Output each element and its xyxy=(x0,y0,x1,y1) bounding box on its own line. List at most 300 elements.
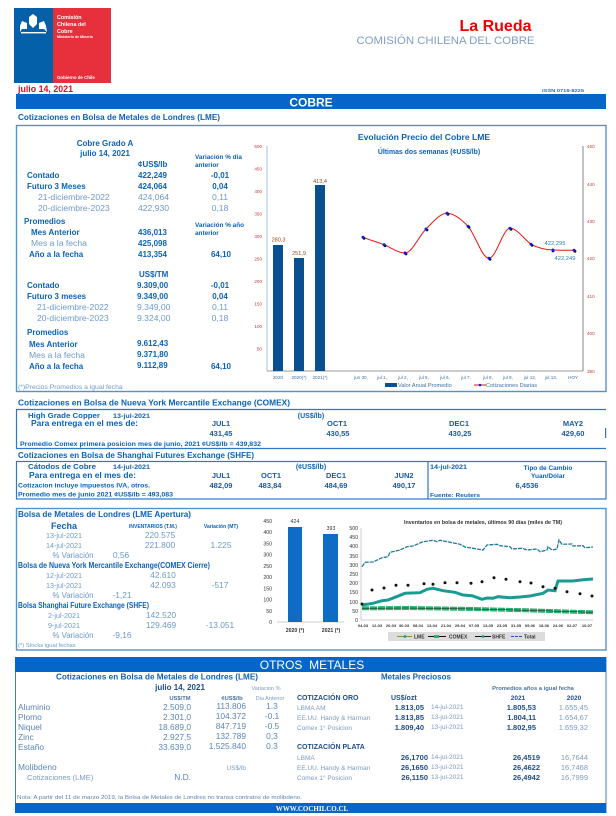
panel: SHFE: Tipo de Cambio xyxy=(524,465,572,472)
x axis: 30-03 xyxy=(399,623,410,628)
table: copper grade A: 422,930 xyxy=(138,203,169,213)
left axis: 200 xyxy=(254,279,262,284)
chart: inventory bars: 250 xyxy=(263,564,272,570)
table: precious metals: EE.UU. Handy & Harman xyxy=(297,765,371,772)
panel: SHFE: Yuan/Dólar xyxy=(531,473,565,480)
x axis: 21-04 xyxy=(441,623,452,628)
table: inventories: -13.051 xyxy=(206,620,235,630)
legend: COMEX xyxy=(449,634,468,640)
table: inventories: % Variación xyxy=(52,631,94,640)
panel: SHFE: 483,84 xyxy=(259,481,282,490)
left axis: 250 xyxy=(254,256,262,262)
table: precious metals: 1.802,95 xyxy=(507,723,536,732)
table: precious metals: 2021 xyxy=(511,695,526,702)
line: LME xyxy=(362,579,593,605)
chart: inventory bars: 100 xyxy=(263,598,272,604)
footer: website xyxy=(15,803,606,813)
table: inventories: 2-jul-2021 xyxy=(48,611,80,620)
table: copper grade A: Futuro 3 meses xyxy=(27,292,87,301)
table: inventories: Bolsa de Nueva York Mercantile Exchange(COMEX Cierre) xyxy=(18,561,210,570)
table: precious metals: COTIZACIÓN PLATA xyxy=(297,742,365,751)
x axis labels: 2020(*) xyxy=(291,375,307,380)
x axis: 18-06 xyxy=(539,623,550,628)
panel: COMEX: Promedio Comex primera posicion mes de junio, 2021 ¢US$/lb = 439,832 xyxy=(20,442,262,448)
table: copper grade A: 413,354 xyxy=(138,250,167,259)
x axis labels: HOY xyxy=(568,375,578,380)
table: precious metals: 13-jul-2021 xyxy=(431,764,464,771)
table: precious metals: 14-jul-2021 xyxy=(431,704,464,711)
heading: LME: Cotizaciones en Bolsa de Metales de Londres (LME) xyxy=(18,113,220,122)
table: copper grade A: 9.309,00 xyxy=(137,281,169,290)
table: base metals: -0.5 xyxy=(265,721,280,731)
x axis labels: jul 6, xyxy=(439,375,450,380)
left axis: 100 xyxy=(254,324,262,329)
table: inventories: (*) Stocks igual fechas xyxy=(18,643,76,649)
table: precious metals: 1.809,40 xyxy=(395,723,424,732)
table: precious metals: 1.804,11 xyxy=(507,713,536,722)
table: base metals: Variacion % xyxy=(252,686,281,692)
table: base metals: 2.301,0 xyxy=(163,712,191,722)
y axis: 400 xyxy=(349,544,358,550)
right axis: 390 xyxy=(587,369,595,374)
table: inventories xyxy=(18,510,238,649)
table: base metals: ¢US$/lb xyxy=(221,696,243,702)
table: inventories: 220.575 xyxy=(145,530,175,540)
table: precious metals: 13-jul-2021 xyxy=(431,774,464,781)
section banner: COBRE: COBRE xyxy=(289,96,333,110)
right axis: 440 xyxy=(587,182,595,187)
left axis xyxy=(254,144,262,352)
table: copper grade A: 20-diciembre-2023 xyxy=(38,203,110,213)
panel: SHFE: Cátodos de Cobre xyxy=(28,464,96,471)
table: inventories: -517 xyxy=(212,580,229,590)
right axis: 450 xyxy=(587,144,595,149)
panel: SHFE: JUN2 xyxy=(394,471,414,480)
chart: inventories last 90 days: Inventarios en bolsa de metales, últimos 90 días (miles de TM) xyxy=(404,520,562,526)
y axis: 50 xyxy=(352,609,358,615)
bars: annual average: 280,3 xyxy=(272,238,285,244)
table: inventories: Fecha xyxy=(51,521,78,531)
table: copper grade A: Mes a la fecha xyxy=(31,238,87,248)
legend: Valor Anual Promedio xyxy=(398,383,452,389)
panel: SHFE: OCT1 xyxy=(261,471,281,480)
table: copper grade A: Contado xyxy=(27,281,60,290)
legend xyxy=(385,383,537,389)
table: copper grade A: anterior xyxy=(195,230,219,237)
panel: SHFE: 490,17 xyxy=(393,481,415,490)
panel: COMEX: DEC1 xyxy=(449,419,469,428)
table: base metals: 2.509,0 xyxy=(163,702,191,712)
footer: website: WWW.COCHILCO.CL xyxy=(276,805,349,813)
left axis: 50 xyxy=(257,346,262,352)
table: copper grade A: anterior xyxy=(195,162,219,169)
table: copper grade A: 20-diciembre-2023 xyxy=(37,313,109,323)
table: copper grade A: Variación % año xyxy=(195,222,244,229)
x axis: 04-03 xyxy=(358,623,369,628)
chart: inventory bars: 0 xyxy=(269,620,272,626)
table: precious metals: Promedios años a igual fecha xyxy=(492,686,575,692)
legend: LME xyxy=(414,634,425,640)
line: daily prices: 422,249 xyxy=(555,256,575,262)
panel: SHFE: 482,09 xyxy=(210,481,232,490)
x axis labels: jul 9, xyxy=(502,375,513,380)
title: La Rueda xyxy=(459,18,532,35)
x axis labels: jul 13, xyxy=(544,375,557,380)
table: precious metals: 1.813,05 xyxy=(395,703,424,712)
chart: copper price evolution: Últimas dos semanas (¢US$/lb) xyxy=(378,147,480,156)
y axis: 0 xyxy=(355,618,358,624)
date: julio 14, 2021 xyxy=(17,84,73,94)
table: precious metals: EE.UU. Handy & Harman xyxy=(297,715,371,722)
chart: inventory bars: 2021 (*) xyxy=(322,628,340,634)
chart: inventory bars: 150 xyxy=(263,586,272,592)
chart: inventory bars xyxy=(263,519,344,634)
table: base metals: 104.372 xyxy=(216,711,246,721)
left axis: 500 xyxy=(254,144,262,149)
table: copper grade A: 0,04 xyxy=(212,182,228,191)
table: inventories: 42.610 xyxy=(150,570,176,580)
table: base metals: -0.1 xyxy=(265,711,280,721)
table: base metals: Aluminio xyxy=(18,702,50,712)
chart: inventory bars: 400 xyxy=(263,530,272,536)
chart: inventories last 90 days xyxy=(349,520,594,641)
table: precious metals: 16,7644 xyxy=(561,753,588,762)
table: inventories: 1.225 xyxy=(211,540,232,550)
x axis labels: jul 5, xyxy=(418,375,429,380)
panel: SHFE: 6,4536 xyxy=(516,481,538,490)
table: inventories: 0,56 xyxy=(113,550,129,560)
table: precious metals: 13-jul-2021 xyxy=(431,714,464,721)
table: copper grade A xyxy=(18,139,244,391)
table: base metals: Plomo xyxy=(18,712,42,722)
table: base metals: 113.806 xyxy=(216,701,246,711)
table: precious metals: 26,1150 xyxy=(401,773,428,782)
table: copper grade A: 21-diciembre-2022 xyxy=(38,192,110,202)
heading: SHFE: Cotizaciones en Bolsa de Shanghai Futures Exchange (SHFE) xyxy=(18,451,254,460)
y axis: 300 xyxy=(349,563,358,569)
table: base metals: Zinc xyxy=(18,732,34,742)
table: base metals: 132.789 xyxy=(216,731,246,741)
y axis: 150 xyxy=(349,590,358,596)
panel: SHFE: 14-jul-2021 xyxy=(430,465,468,471)
table: precious metals: 26,1650 xyxy=(401,763,428,772)
table: copper grade A: 64,10 xyxy=(211,250,232,259)
table: precious metals: 1.654,67 xyxy=(559,713,588,722)
chart: copper price evolution: Evolución Precio del Cobre LME xyxy=(358,132,490,142)
logo: Comisión Chilena del Cobre: Ministerio de Minería xyxy=(57,35,94,39)
left axis: 350 xyxy=(254,212,262,216)
heading: COMEX: Cotizaciones en Bolsa de Nueva York Mercantile Exchange (COMEX) xyxy=(18,398,290,408)
right axis: 430 xyxy=(587,219,595,224)
table: precious metals: 26,4622 xyxy=(513,763,540,772)
panel: COMEX: 13-jul-2021 xyxy=(113,413,150,420)
table: copper grade A: 9.349,00 xyxy=(137,292,169,301)
table: inventories: Variación (MT) xyxy=(204,524,238,530)
chart: inventory bars: 424 xyxy=(291,519,299,525)
table: copper grade A: julio 14, 2021 xyxy=(79,149,130,158)
left axis: 300 xyxy=(254,234,262,239)
x axis: 31-05 xyxy=(511,623,522,628)
table: base metals xyxy=(17,672,302,801)
panel: COMEX: High Grade Copper xyxy=(28,413,100,420)
table: copper grade A: Promedios xyxy=(27,328,69,337)
table: base metals: Cotizaciones en Bolsa de Metales de Londres (LME) xyxy=(56,672,258,682)
table: copper grade A: 422,249 xyxy=(138,171,167,180)
table: copper grade A: US$/TM xyxy=(139,270,169,279)
x axis labels: jul 12, xyxy=(523,375,536,380)
table: copper grade A: 0,04 xyxy=(212,292,228,301)
table: copper grade A: -0,01 xyxy=(211,281,230,290)
table: base metals: US$/TM xyxy=(169,696,191,702)
logo: Comisión Chilena del Cobre: Gobierno de Chile xyxy=(57,75,95,80)
x axis: 10-07 xyxy=(582,623,593,628)
bars: annual average: 251,9 xyxy=(292,251,306,257)
panel: SHFE: 14-jul-2021 xyxy=(113,464,150,471)
banner: OTROS METALES xyxy=(15,657,606,672)
panel: COMEX xyxy=(16,410,606,448)
panel: SHFE: Promedio mes de junio 2021 ¢US$/lb = 493,083 xyxy=(18,492,174,498)
table: copper grade A: 9.371,80 xyxy=(137,350,169,359)
y axis: 350 xyxy=(349,554,358,560)
line: COMEX xyxy=(362,608,593,612)
table: copper grade A: Mes Anterior xyxy=(29,340,78,349)
table: precious metals: 14-jul-2021 xyxy=(431,754,464,761)
y axis: 100 xyxy=(349,600,358,606)
table: precious metals: 16,7999 xyxy=(561,773,588,782)
bars: annual average: 413,4 xyxy=(313,179,327,185)
legend: SHFE xyxy=(492,634,506,640)
y axis xyxy=(349,526,358,624)
table: base metals: N.D. xyxy=(174,772,191,782)
right axis: 400 xyxy=(587,331,595,336)
panel: COMEX: 431,45 xyxy=(210,429,232,438)
right axis: 420 xyxy=(587,256,595,261)
table: base metals: 847.719 xyxy=(216,721,246,731)
table: base metals: Nota: A partir del 11 de marzo 2019, la Bolsa de Metales de Londres no transa contratos de molibdeno. xyxy=(17,795,302,801)
table: copper grade A: 0,18 xyxy=(212,313,229,323)
x axis: 23-05 xyxy=(497,623,508,628)
icon: coat of arms xyxy=(20,14,47,33)
table: precious metals: 26,4942 xyxy=(513,773,540,782)
chart: inventory bars: 393 xyxy=(327,526,335,532)
section banner: COBRE xyxy=(16,94,606,110)
table: copper grade A: Contado xyxy=(27,171,60,180)
table: inventories: 13-jul-2021 xyxy=(46,581,82,590)
table: precious metals: US$/ozt xyxy=(391,695,417,702)
table: base metals: US$/lb xyxy=(226,765,246,772)
table: base metals: 18.689,0 xyxy=(158,722,191,732)
chart: inventory bars: 350 xyxy=(263,542,272,548)
x axis: 02-07 xyxy=(567,623,578,628)
table: copper grade A: Mes a la fecha xyxy=(29,350,85,360)
table: base metals: 1.525.840 xyxy=(209,741,246,751)
table: copper grade A: 64,10 xyxy=(211,362,232,371)
table: precious metals xyxy=(297,672,588,782)
table: inventories: 9-jul-2021 xyxy=(48,621,80,630)
table: copper grade A: 0,11 xyxy=(212,302,228,312)
chart: inventory bars: 200 xyxy=(263,575,272,581)
x axis: 07-05 xyxy=(469,623,480,628)
legend: Total xyxy=(524,634,536,640)
panel: SHFE: (¢US$/lb) xyxy=(296,464,326,471)
table: copper grade A: Variación % dia xyxy=(195,154,242,161)
table: precious metals: Comex 1° Posicion xyxy=(297,724,352,732)
logo: Comisión Chilena del Cobre: Comisión xyxy=(57,15,82,21)
line: daily prices xyxy=(362,212,576,262)
table: precious metals: 1.813,85 xyxy=(395,713,424,722)
x axis: 13-04 xyxy=(427,623,438,628)
legend xyxy=(388,632,545,641)
line: daily prices: 422,295 xyxy=(545,241,565,247)
right axis: 410 xyxy=(587,294,595,299)
y axis: 500 xyxy=(349,526,358,532)
logo: Comisión Chilena del Cobre: Chilena del xyxy=(57,22,86,28)
panel: COMEX: JUL1 xyxy=(212,419,230,428)
table: inventories: % Variación xyxy=(52,551,94,560)
table: inventories: 129.469 xyxy=(146,620,176,630)
table: copper grade A: ¢US$/lb xyxy=(138,160,167,169)
table: base metals: 33.639,0 xyxy=(158,742,191,752)
panel: COMEX: 430,25 xyxy=(449,429,471,438)
x axis: 29-04 xyxy=(455,623,466,628)
panel: COMEX: Para entrega en el mes de: xyxy=(31,419,138,428)
table: precious metals: 2020 xyxy=(567,695,582,702)
table: inventories: Bolsa de Metales de Londres (LME Apertura) xyxy=(18,510,191,519)
banner: OTROS METALES: OTROS METALES xyxy=(260,658,364,672)
line: Total xyxy=(362,540,593,567)
logo: Comisión Chilena del Cobre xyxy=(14,8,111,83)
table: copper grade A: 9.112,89 xyxy=(137,361,168,370)
table: copper grade A: Promedios xyxy=(24,217,66,226)
table: inventories: INVENTARIOS (T.M.) xyxy=(129,524,177,530)
x axis: 13-05 xyxy=(483,623,494,628)
table: precious metals: LBMA xyxy=(297,755,315,762)
table: precious metals: Metales Preciosos xyxy=(381,672,452,682)
table: inventories: 42.093 xyxy=(150,580,176,590)
left axis: 450 xyxy=(254,166,262,172)
logo: Comisión Chilena del Cobre: Cobre xyxy=(57,29,73,35)
title xyxy=(356,18,535,47)
panel: COMEX: MAY2 xyxy=(563,419,583,428)
x axis: 09-06 xyxy=(525,623,536,628)
title: COMISIÓN CHILENA DEL COBRE xyxy=(356,34,535,47)
table: precious metals: 26,4519 xyxy=(513,753,540,762)
bars: annual average xyxy=(272,179,327,371)
table: inventories: 14-jul-2021 xyxy=(46,541,82,550)
table: base metals: 0,3 xyxy=(266,731,278,741)
ISSN: ISSN 0716-8225 xyxy=(542,88,584,94)
x axis labels: jul 1, xyxy=(376,375,387,380)
panel: SHFE: Cotizacion incluye impuestos IVA, otros. xyxy=(18,484,150,490)
table: copper grade A: 436,013 xyxy=(138,228,167,237)
table: copper grade A: 9.324,00 xyxy=(137,313,171,323)
x axis labels: jul 8, xyxy=(482,375,493,380)
table: inventories: % Variación xyxy=(52,591,94,600)
table: precious metals: 1.659,32 xyxy=(559,723,588,732)
y axis: 200 xyxy=(349,581,358,587)
table: copper grade A: Año a la fecha xyxy=(29,362,84,371)
left axis: 150 xyxy=(254,302,262,306)
panel: SHFE: JUL1 xyxy=(212,471,230,480)
x axis xyxy=(358,623,593,628)
table: copper grade A: 0,18 xyxy=(212,203,229,213)
table: copper grade A: 425,098 xyxy=(138,239,167,248)
panel: inventories xyxy=(16,508,606,650)
chart: inventory bars: 2020 (*) xyxy=(286,628,304,634)
x axis labels: jul 2, xyxy=(397,375,408,380)
table: copper grade A: Cobre Grado A xyxy=(77,139,134,148)
table: precious metals: 1.805,53 xyxy=(507,703,536,712)
y axis: 250 xyxy=(349,572,358,578)
x axis labels: 2021(*) xyxy=(312,375,328,380)
x axis labels: jun 30, xyxy=(353,375,368,380)
panel: SHFE: Fuente: Reuters xyxy=(430,493,480,499)
chart: inventory bars: 50 xyxy=(266,609,272,615)
table: inventories: -9,16 xyxy=(112,630,132,640)
table: precious metals: 13-jul-2021 xyxy=(431,724,464,731)
table: precious metals: 16,7468 xyxy=(561,763,588,772)
panel: otros metales xyxy=(15,657,606,813)
table: copper grade A: Futuro 3 Meses xyxy=(27,182,86,191)
x axis labels xyxy=(273,375,578,380)
table: base metals: Dia Anterior xyxy=(256,696,285,702)
chart: copper price evolution xyxy=(254,132,595,389)
table: inventories: 221.800 xyxy=(145,540,175,550)
legend: Cotizaciones Diarias xyxy=(486,383,537,389)
table: base metals: Niquel xyxy=(18,722,42,732)
table: copper grade A: 21-diciembre-2022 xyxy=(37,302,109,312)
line: COMEX core xyxy=(362,608,593,612)
table: inventories: 13-jul-2021 xyxy=(46,531,82,540)
table: copper grade A: 0,11 xyxy=(212,192,228,202)
x axis: 20-03 xyxy=(386,623,397,628)
table: base metals: Cotizaciones (LME) xyxy=(27,773,94,782)
panel: COMEX: OCT1 xyxy=(327,419,347,428)
chart: inventory bars: 300 xyxy=(263,552,272,558)
y axis: 450 xyxy=(349,535,358,541)
table: precious metals: COTIZACIÓN ORO xyxy=(297,693,359,702)
x axis: 24-06 xyxy=(553,623,564,628)
panel: SHFE: Para entrega en el mes de: xyxy=(29,471,136,480)
table: base metals: julio 14, 2021 xyxy=(154,683,205,692)
table: copper grade A: 9.349,00 xyxy=(137,302,171,312)
table: inventories: -1,21 xyxy=(112,590,132,600)
table: precious metals: 26,1700 xyxy=(401,753,428,762)
x axis labels: 2020 xyxy=(273,375,284,380)
right axis xyxy=(587,144,595,374)
panel: SHFE: DEC1 xyxy=(326,471,346,480)
panel: COMEX: 430,55 xyxy=(327,429,349,438)
markers: SHFE xyxy=(360,576,594,606)
table: precious metals: 1.655,45 xyxy=(559,703,588,712)
chart: inventory bars: 450 xyxy=(263,519,272,525)
table: base metals: Molibdeno xyxy=(18,762,57,772)
x axis: 08-04 xyxy=(413,623,424,628)
table: inventories: 12-jul-2021 xyxy=(46,571,82,580)
panel: SHFE xyxy=(16,461,606,499)
table: precious metals: Comex 1° Posicion xyxy=(297,774,352,782)
table: base metals: Estaño xyxy=(18,742,44,752)
table: copper grade A: Año a la fecha xyxy=(29,250,84,259)
x axis: 12-03 xyxy=(372,623,383,628)
table: base metals: 0.3 xyxy=(266,741,278,751)
table: copper grade A: Mes Anterior xyxy=(31,228,80,237)
left axis: 400 xyxy=(254,189,262,194)
table: base metals: 1.3 xyxy=(266,701,278,711)
table: copper grade A: 9.612,43 xyxy=(137,339,169,348)
table: base metals: 2.927,5 xyxy=(163,732,191,742)
panel: COMEX: (US$/lb) xyxy=(298,413,324,420)
